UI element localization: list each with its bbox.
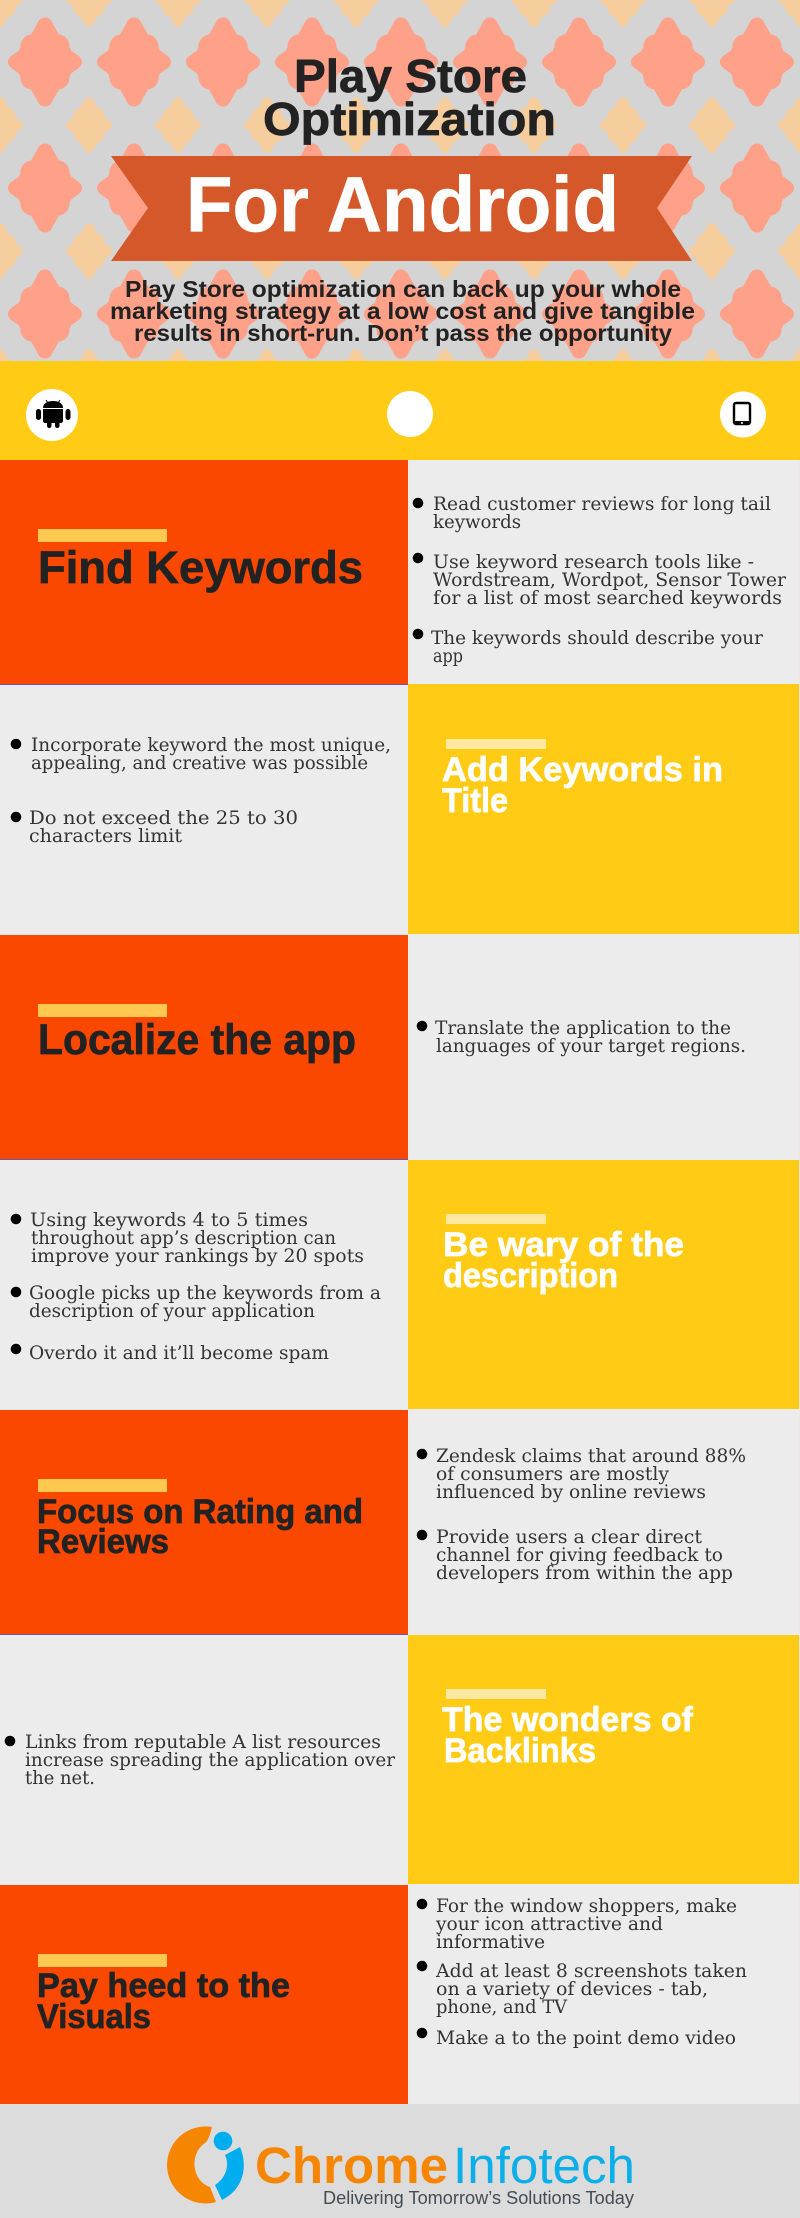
tip 3: Overdo it and it’ll become spam: [29, 1343, 329, 1364]
tip 1: your icon attractive and: [435, 1914, 663, 1935]
tip 1: [417, 1896, 737, 1953]
tip: languages of your target regions.: [436, 1036, 746, 1057]
tip 2: channel for giving feedback to: [436, 1545, 723, 1566]
tip 2: Do not exceed the 25 to 30: [29, 808, 298, 829]
panel: visuals tips: [408, 1884, 799, 2104]
panel: find keywords tips: [408, 460, 799, 684]
panel: backlinks heading: [408, 1635, 799, 1884]
heading: Find Keywords: [38, 542, 363, 593]
panel: visuals heading: [0, 1885, 408, 2104]
tip 1: appealing, and creative was possible: [31, 753, 368, 774]
heading: Focus on Rating and: [37, 1493, 363, 1531]
tip 1: Zendesk claims that around 88%: [436, 1446, 746, 1467]
tip 2: [413, 552, 786, 609]
tip 3: The keywords should describe your: [431, 628, 763, 649]
tip: Translate the application to the: [435, 1018, 731, 1039]
heading: description: [443, 1257, 618, 1295]
tip 1: For the window shoppers, make: [436, 1896, 737, 1917]
accent bar: [38, 1479, 167, 1492]
tip: increase spreading the application over: [25, 1750, 395, 1771]
icon strip: [0, 361, 800, 460]
tip 2: on a variety of devices - tab,: [436, 1979, 708, 2000]
tip 1: Read customer reviews for long tail: [433, 494, 771, 515]
tip 2: Use keyword research tools like -: [433, 552, 754, 573]
tip 2: [417, 1527, 733, 1584]
heading: Reviews: [37, 1523, 169, 1561]
intro paragraph: [110, 276, 695, 346]
tip 3: [413, 628, 763, 667]
panel: add keywords heading: [408, 684, 799, 934]
logo wordmark: [255, 2137, 635, 2194]
icon: android: [26, 389, 78, 441]
accent bar: [38, 1954, 167, 1967]
footer: [0, 2104, 800, 2218]
tagline: Delivering Tomorrow’s Solutions Today: [323, 2188, 634, 2208]
panel: description tips: [0, 1160, 408, 1410]
accent bar: [446, 739, 546, 749]
icon: phone: [720, 392, 766, 438]
tip 1: influenced by online reviews: [436, 1482, 706, 1503]
heading: [37, 1493, 363, 1561]
tip 2: Wordstream, Wordpot, Sensor Tower: [433, 570, 786, 591]
panel: ratings heading: [0, 1410, 408, 1635]
heading: Add Keywords in: [442, 751, 723, 789]
heading: [442, 1701, 694, 1770]
tip 1: Incorporate keyword the most unique,: [31, 735, 391, 756]
tip 2: phone, and TV: [436, 1997, 568, 2018]
icon: blank circle: [387, 391, 433, 437]
tip 1: of consumers are mostly: [436, 1464, 670, 1485]
tip 2: [11, 1283, 381, 1322]
heading: Pay heed to the: [37, 1967, 290, 2005]
accent bar: [38, 1004, 167, 1017]
tip 1: [11, 735, 391, 774]
tip 1: informative: [436, 1932, 545, 1953]
header panel: [0, 0, 800, 361]
tip 2: Provide users a clear direct: [436, 1527, 703, 1548]
panel: description heading: [408, 1160, 799, 1409]
tip 3: app: [433, 646, 463, 667]
heading: Backlinks: [444, 1732, 596, 1770]
heading: [443, 1226, 684, 1295]
heading: Localize the app: [38, 1016, 356, 1064]
tip 1: [417, 1446, 746, 1503]
logo wordmark: Chrome: [255, 2137, 448, 2194]
tip 2: [11, 808, 298, 847]
ribbon banner: [111, 156, 692, 261]
heading: Visuals: [37, 1998, 151, 2036]
title: Optimization: [263, 93, 556, 145]
panel: ratings tips: [408, 1409, 799, 1635]
tip 2: description of your application: [29, 1301, 315, 1322]
intro paragraph: results in short-run. Don’t pass the opportunity: [134, 320, 672, 346]
heading: [442, 751, 723, 820]
accent bar: [446, 1214, 546, 1224]
intro paragraph: marketing strategy at a low cost and give tangible: [110, 298, 695, 324]
tip 2: characters limit: [29, 826, 183, 847]
panel: find keywords heading: [0, 460, 408, 685]
panel: localize tips: [408, 934, 799, 1160]
banner heading: For Android: [186, 160, 619, 248]
tip 1: [11, 1210, 364, 1267]
tip 1: Using keywords 4 to 5 times: [30, 1210, 308, 1231]
tip: [417, 1018, 746, 1057]
tip 1: keywords: [433, 512, 521, 533]
heading: Title: [442, 782, 508, 820]
heading: Be wary of the: [443, 1226, 684, 1264]
tip 2: [417, 1961, 747, 2018]
accent bar: [446, 1689, 546, 1699]
tip 2: developers from within the app: [436, 1563, 733, 1584]
heading: [37, 1967, 290, 2036]
title: [263, 50, 556, 145]
tip 1: [413, 494, 771, 533]
intro paragraph: Play Store optimization can back up your whole: [125, 276, 681, 302]
tip 1: throughout app’s description can: [31, 1228, 336, 1249]
panel: add keywords tips: [0, 685, 408, 935]
tip 2: Google picks up the keywords from a: [29, 1283, 381, 1304]
tip: [5, 1732, 395, 1789]
tip 3: Make a to the point demo video: [436, 2028, 736, 2049]
tip 2: Add at least 8 screenshots taken: [435, 1961, 747, 1982]
accent bar: [38, 529, 167, 542]
tip: the net.: [25, 1768, 95, 1789]
heading: The wonders of: [442, 1701, 694, 1739]
tip: Links from reputable A list resources: [25, 1732, 381, 1753]
panel: backlinks tips: [0, 1635, 408, 1885]
tip 1: improve your rankings by 20 spots: [31, 1246, 364, 1267]
logo mark: [167, 2126, 244, 2203]
title: Play Store: [294, 50, 527, 102]
tip 2: for a list of most searched keywords: [433, 588, 782, 609]
logo wordmark: Infotech: [453, 2137, 635, 2194]
panel: localize heading: [0, 935, 408, 1160]
